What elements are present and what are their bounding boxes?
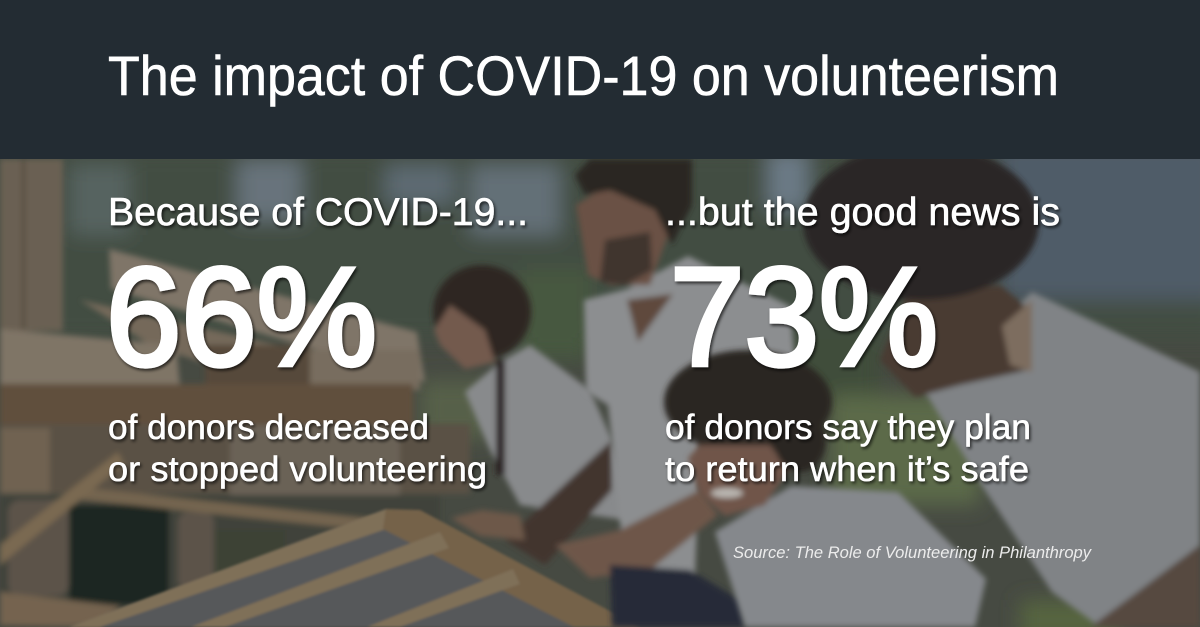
background photo: volunteers building a wooden frame (0, 140, 1200, 627)
right description: to return when it’s safe (665, 450, 1029, 489)
left description: or stopped volunteering (108, 450, 487, 489)
source note: Source: The Role of Volunteering in Philanthropy (733, 543, 1092, 562)
right description: of donors say they plan (665, 408, 1031, 447)
left number: 66%: 66% (106, 238, 377, 395)
wooden frame, foreground (69, 509, 640, 627)
header bar (0, 0, 1200, 159)
right number: 73%: 73% (670, 238, 938, 395)
panel: right statistic (665, 191, 1060, 489)
right description (665, 408, 1031, 489)
left lead-in: Because of COVID-19... (108, 191, 528, 234)
woman in front (664, 350, 986, 627)
title: The impact of COVID-19 on volunteerism (108, 44, 1059, 107)
wooden structure, left (0, 159, 470, 627)
panel: left statistic (106, 191, 528, 489)
right lead-in: ...but the good news is (665, 191, 1060, 234)
woman in back (433, 265, 640, 565)
left description: of donors decreased (108, 408, 429, 447)
man on right (803, 144, 1200, 627)
left description (108, 408, 487, 489)
man in center (555, 159, 800, 627)
sky and trees (0, 140, 1200, 627)
